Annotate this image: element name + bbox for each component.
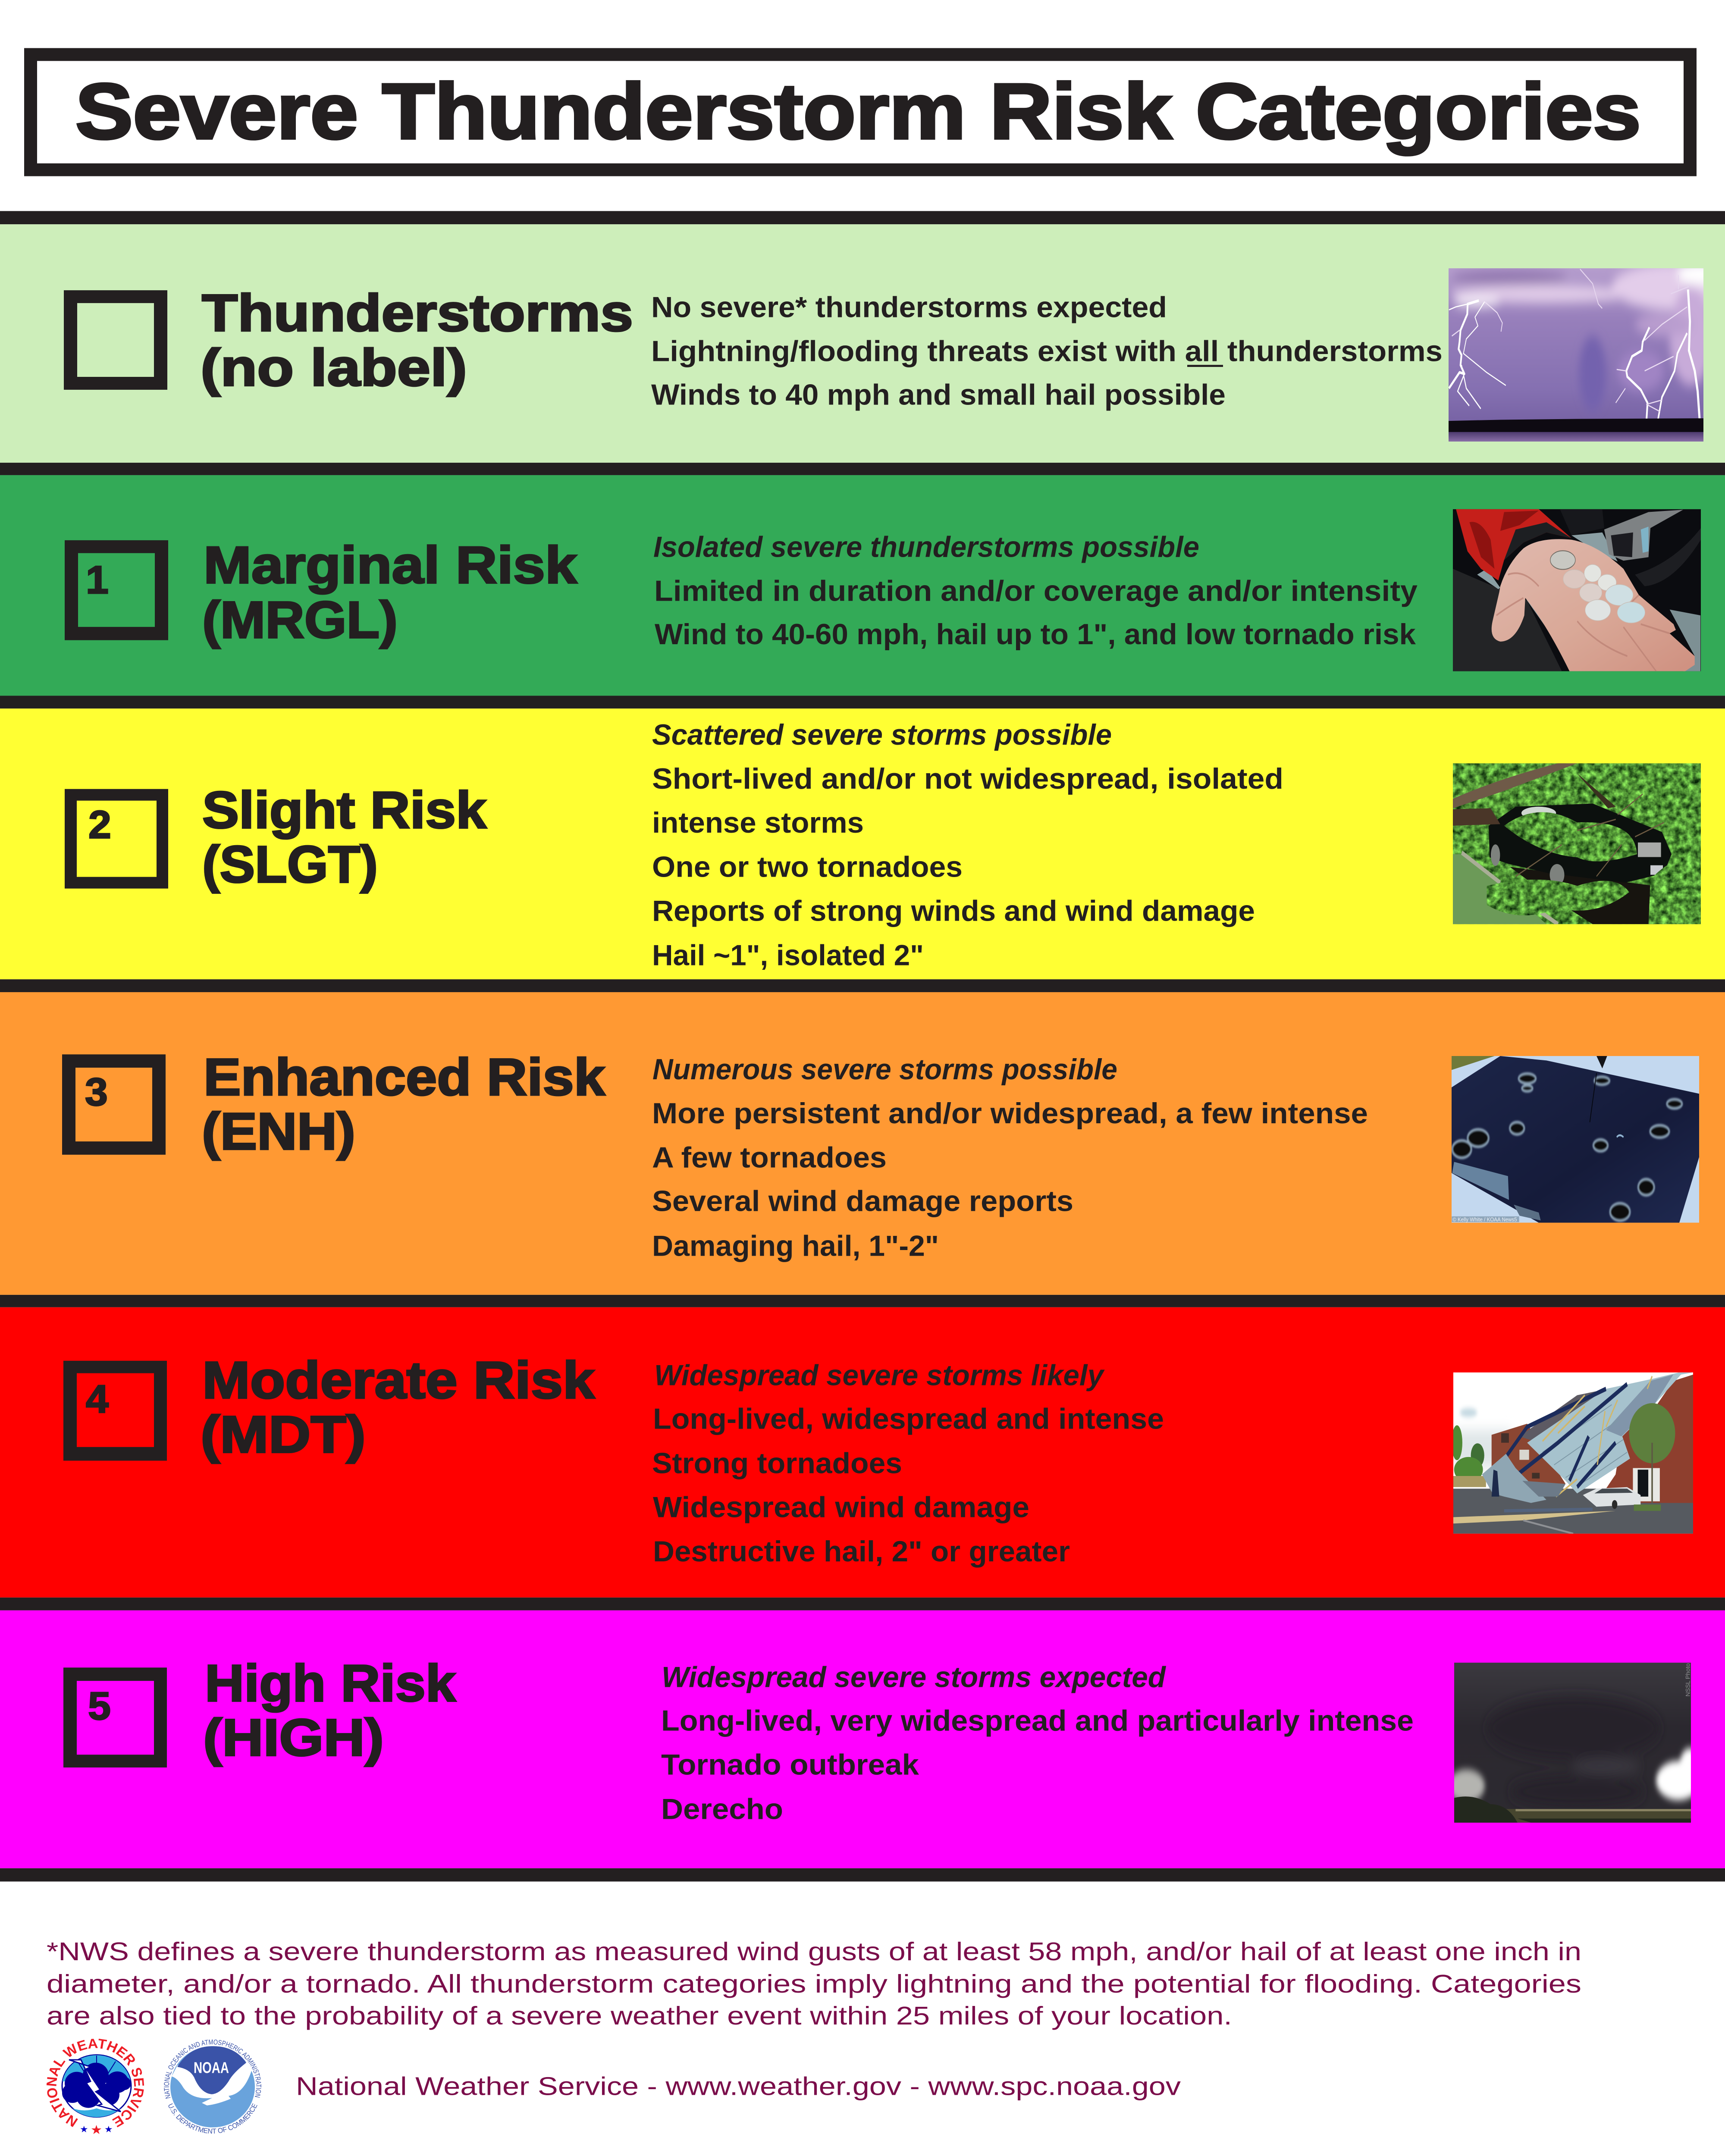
photo: hailstones in a hand xyxy=(1453,509,1701,671)
icon: category 3 box: 3 xyxy=(85,1070,108,1114)
text: enhanced description xyxy=(652,1053,1368,1262)
text: marginal description: Wind to 40-60 mph, hail up to 1", and low tornado risk xyxy=(655,618,1416,651)
heading: slight risk xyxy=(202,781,486,894)
heading: marginal risk: (MRGL) xyxy=(202,591,398,649)
text: enhanced description: Damaging hail, 1"-2" xyxy=(652,1230,939,1262)
icon: category 3 box xyxy=(62,1054,166,1155)
text: enhanced description: Numerous severe storms possible xyxy=(652,1053,1117,1086)
text: thunderstorm description: No severe* thunderstorms expected xyxy=(651,291,1167,323)
heading: slight risk: (SLGT) xyxy=(202,835,378,894)
footnote text: *NWS defines a severe thunderstorm as measured wind gusts of at least 58 mph, and/or hail of at least one inch in xyxy=(47,1937,1581,1966)
panel: slight risk xyxy=(0,708,1725,979)
heading: enhanced risk: Enhanced Risk xyxy=(204,1048,605,1106)
photo: collapsed roof on a building xyxy=(1452,1373,1693,1534)
photo: hail damaged car: © Kelly White / KOAA News5 xyxy=(1452,1217,1517,1223)
icon: empty category box xyxy=(64,290,167,390)
footer organisation and links: National Weather Service - www.weather.gov - www.spc.noaa.gov xyxy=(296,2072,1181,2100)
icon: National Weather Service logo: NATIONAL WEATHER SERVICE xyxy=(44,2036,147,2130)
icon: National Weather Service logo: ★ xyxy=(80,2124,88,2134)
icon: National Weather Service logo: ★ xyxy=(91,2123,102,2137)
heading: marginal risk: Marginal Risk xyxy=(204,536,577,594)
text: moderate description: Long-lived, widespread and intense xyxy=(653,1403,1164,1435)
text: enhanced description: A few tornadoes xyxy=(652,1141,887,1174)
icon: NOAA logo: U.S. DEPARTMENT OF COMMERCE xyxy=(166,2102,259,2135)
text: moderate description: Widespread wind damage xyxy=(653,1491,1029,1523)
text: slight description: Scattered severe storms possible xyxy=(652,718,1112,751)
photo: wedge tornado xyxy=(1448,1663,1700,1823)
text: moderate description: Strong tornadoes xyxy=(652,1447,902,1479)
icon: category 4 box xyxy=(63,1361,167,1461)
heading: thunderstorms: Thunderstorms xyxy=(202,284,633,342)
photo: purple sky with lightning xyxy=(1449,262,1725,442)
panel: marginal risk xyxy=(0,475,1725,696)
heading: thunderstorms xyxy=(201,284,633,397)
heading: high risk: (HIGH) xyxy=(203,1708,384,1767)
panel: high risk xyxy=(0,1611,1725,1868)
text: high description: Tornado outbreak xyxy=(661,1749,919,1781)
heading: enhanced risk: (ENH) xyxy=(202,1103,355,1161)
text: moderate description: Widespread severe storms likely xyxy=(654,1359,1105,1391)
icon: category 5 box: 5 xyxy=(88,1684,111,1728)
panel: moderate risk xyxy=(0,1307,1725,1598)
heading: moderate risk: Moderate Risk xyxy=(202,1351,595,1410)
text: thunderstorm description: Winds to 40 mph and small hail possible xyxy=(651,379,1226,411)
text: slight description: One or two tornadoes xyxy=(652,851,963,883)
heading: high risk: High Risk xyxy=(205,1654,456,1713)
icon: category 1 box: 1 xyxy=(86,558,109,602)
heading: moderate risk: (MDT) xyxy=(201,1405,366,1464)
icon: category 2 box xyxy=(65,789,168,889)
heading: high risk xyxy=(203,1654,456,1767)
footnote text: are also tied to the probability of a severe weather event within 25 miles of your location. xyxy=(47,2001,1232,2030)
icon: category 2 box: 2 xyxy=(88,802,111,846)
footnote text xyxy=(47,1937,1581,2030)
panel: thunderstorms (no label) xyxy=(0,224,1725,463)
icon: category 4 box: 4 xyxy=(86,1377,109,1421)
icon: National Weather Service logo: ★ xyxy=(104,2124,113,2134)
text: high description: Long-lived, very widespread and particularly intense xyxy=(661,1705,1414,1737)
heading: slight risk: Slight Risk xyxy=(202,781,486,840)
text: marginal description: Limited in duration and/or coverage and/or intensity xyxy=(654,574,1418,607)
icon: category 5 box xyxy=(63,1667,167,1767)
icon: category 1 box xyxy=(65,540,168,640)
text: slight description: Reports of strong winds and wind damage xyxy=(652,895,1255,927)
text: slight description: Short-lived and/or not widespread, isolated xyxy=(652,762,1283,795)
panel: enhanced risk xyxy=(0,992,1725,1295)
text: high description: Widespread severe storms expected xyxy=(662,1661,1167,1693)
text: marginal description xyxy=(653,531,1418,651)
icon: NOAA logo: NATIONAL OCEANIC AND ATMOSPHERIC ADMINISTRATION xyxy=(163,2038,263,2100)
text: slight description: intense storms xyxy=(652,806,864,839)
icon: NOAA logo xyxy=(163,2038,263,2135)
heading: enhanced risk xyxy=(202,1048,605,1161)
text: moderate description: Destructive hail, 2" or greater xyxy=(653,1535,1070,1568)
text: moderate description xyxy=(652,1359,1164,1568)
photo: hail damaged car xyxy=(1452,1056,1699,1223)
heading: marginal risk xyxy=(202,536,577,649)
text: high description xyxy=(661,1661,1414,1825)
text: high description: Derecho xyxy=(661,1792,783,1825)
title box xyxy=(24,48,1697,176)
text: slight description: Hail ~1", isolated 2" xyxy=(652,939,924,971)
text: slight description xyxy=(652,718,1283,971)
text: thunderstorm description: Lightning/flooding threats exist with all thunderstorms xyxy=(651,335,1443,367)
text: enhanced description: Several wind damage reports xyxy=(652,1185,1073,1217)
photo: fallen tree on a car xyxy=(1453,763,1701,924)
text: thunderstorm description xyxy=(651,291,1443,411)
icon: NOAA logo: NOAA xyxy=(194,2059,229,2077)
heading: moderate risk xyxy=(201,1351,595,1464)
heading: thunderstorms: (no label) xyxy=(201,338,467,397)
text: marginal description: Isolated severe thunderstorms possible xyxy=(653,531,1199,563)
footnote text: diameter, and/or a tornado. All thunderstorm categories imply lightning and the potential for flooding. Categories xyxy=(47,1969,1581,1998)
title text: Severe Thunderstorm Risk Categories xyxy=(75,67,1641,155)
text: enhanced description: More persistent and/or widespread, a few intense xyxy=(652,1097,1368,1130)
